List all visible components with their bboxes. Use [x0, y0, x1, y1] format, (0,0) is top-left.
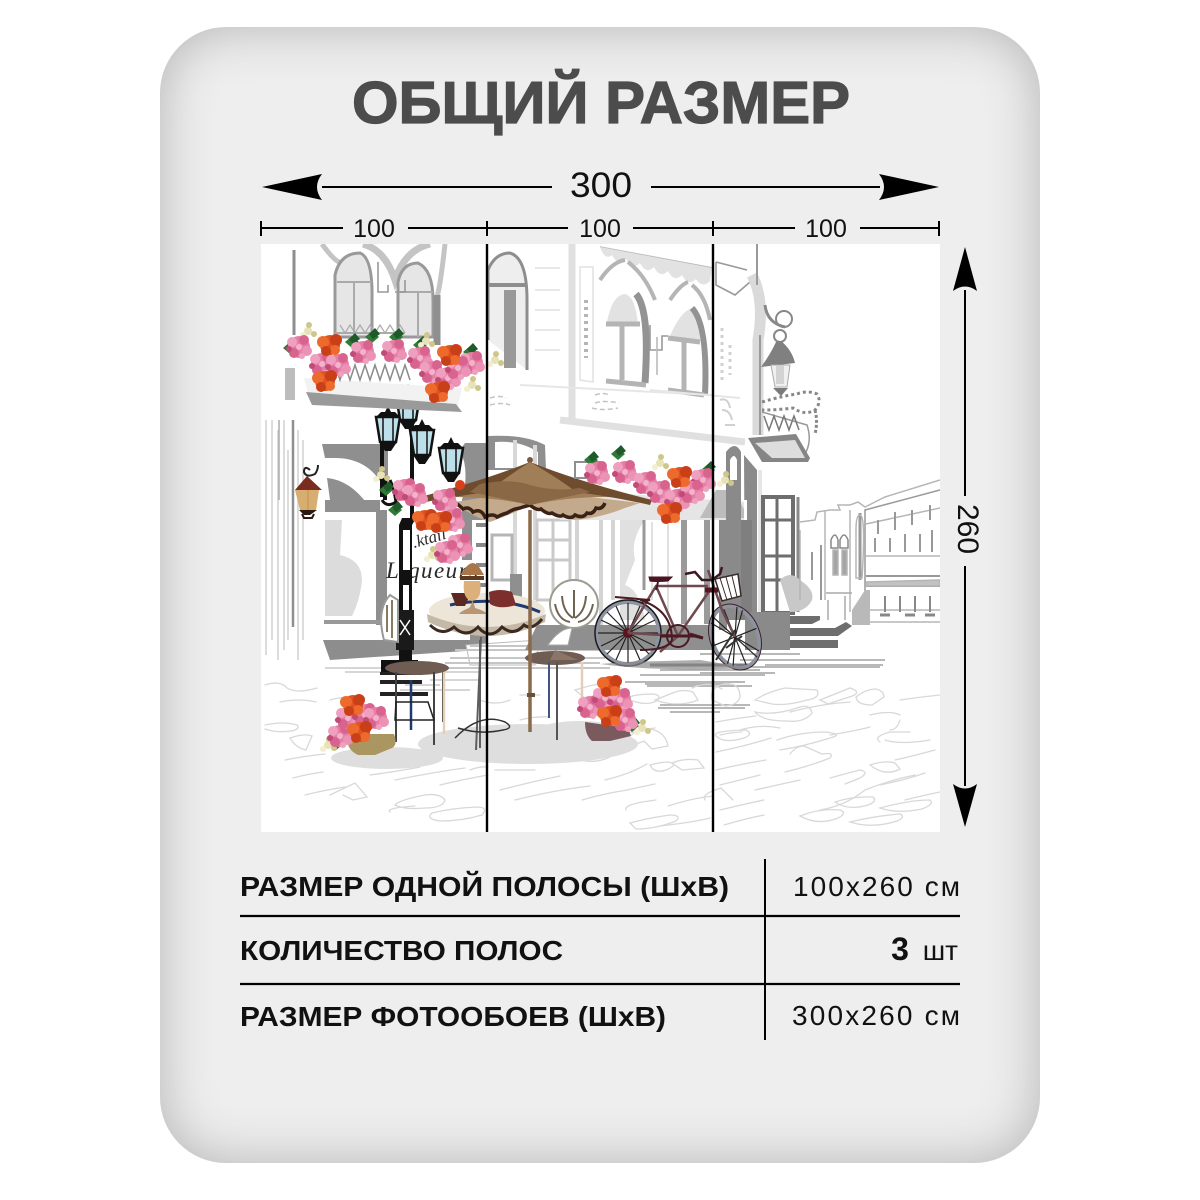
bicycle: front wheel [708, 604, 762, 670]
table lamp [459, 563, 487, 614]
bicycle: basket [715, 574, 741, 601]
panel: background card [160, 27, 1040, 1163]
bicycle: rear wheel [595, 600, 661, 666]
row: strip size label: РАЗМЕР ОДНОЙ ПОЛОСЫ (ШхВ) [240, 870, 729, 902]
flower garland: upper balcony [283, 322, 504, 412]
ground shadow lines [325, 654, 885, 712]
building: ground floor middle and right [560, 446, 852, 650]
bicycle: handlebar [685, 567, 722, 580]
lamp: top [396, 384, 420, 429]
building: upper facade [294, 244, 760, 442]
umbrella canopy [456, 462, 650, 505]
label: 260: 260 [951, 504, 984, 554]
cobblestone pavement [265, 682, 940, 829]
row: strip size value: 100х260 см [793, 871, 960, 902]
illustration: street cafe [261, 244, 940, 832]
balcony: upper right [748, 392, 819, 462]
distant buildings [800, 480, 940, 625]
building: ground floor left [322, 436, 610, 668]
label: second strip 100: 100 [579, 215, 621, 243]
arrow: left [262, 174, 322, 200]
wall lantern [295, 465, 322, 518]
row: wallpaper size label: РАЗМЕР ФОТООБОЕВ (ШхВ) [240, 1001, 666, 1032]
cafe sign text [386, 532, 477, 583]
street lamp [376, 384, 463, 696]
teapot [489, 590, 516, 607]
umbrella underside [457, 497, 640, 522]
flower garland: lamp post [373, 466, 473, 564]
lamp: right [439, 437, 463, 482]
cafe table [427, 563, 546, 750]
chairs [381, 580, 598, 745]
lantern: upper right wall [761, 305, 795, 396]
row: strip count label: КОЛИЧЕСТВО ПОЛОС [240, 935, 563, 966]
label: first strip 100: 100 [353, 215, 395, 243]
bicycle: frame [628, 570, 735, 652]
umbrella [408, 457, 652, 732]
row: strip count value: 3 шт [891, 931, 958, 967]
arrow: down [953, 784, 977, 827]
wall streaks at left [266, 420, 303, 660]
cafe sign text: Liqueurs [385, 558, 478, 583]
teacup [451, 593, 468, 606]
shadows under furniture [331, 721, 638, 769]
lamp: middle [410, 419, 434, 464]
bicycle [594, 566, 762, 670]
chair: left seat [381, 595, 449, 745]
height dimension: 260 [951, 247, 984, 827]
chair: right seat [525, 580, 598, 740]
strip width dimensions: 100 100 100 [261, 215, 940, 243]
arrow: up [953, 247, 977, 291]
bicycle: seat [649, 577, 672, 582]
row: wallpaper size value: 300х260 см [792, 1000, 960, 1031]
flower pot: left [320, 694, 396, 755]
flower garland: umbrella side [575, 445, 734, 524]
lamp: left [376, 406, 400, 451]
shadow under bicycle [600, 660, 750, 669]
table: dimensions [240, 859, 960, 1040]
strip divider lines on the illustration [487, 244, 713, 832]
flower pot: right [577, 675, 651, 741]
label: third strip 100: 100 [805, 215, 847, 243]
label: 300: 300 [570, 166, 632, 205]
total width dimension: 300 [262, 166, 939, 205]
title: ОБЩИЙ РАЗМЕР [352, 69, 850, 136]
sign: ktail: .ktail [410, 524, 448, 552]
arrow: right [879, 174, 939, 200]
